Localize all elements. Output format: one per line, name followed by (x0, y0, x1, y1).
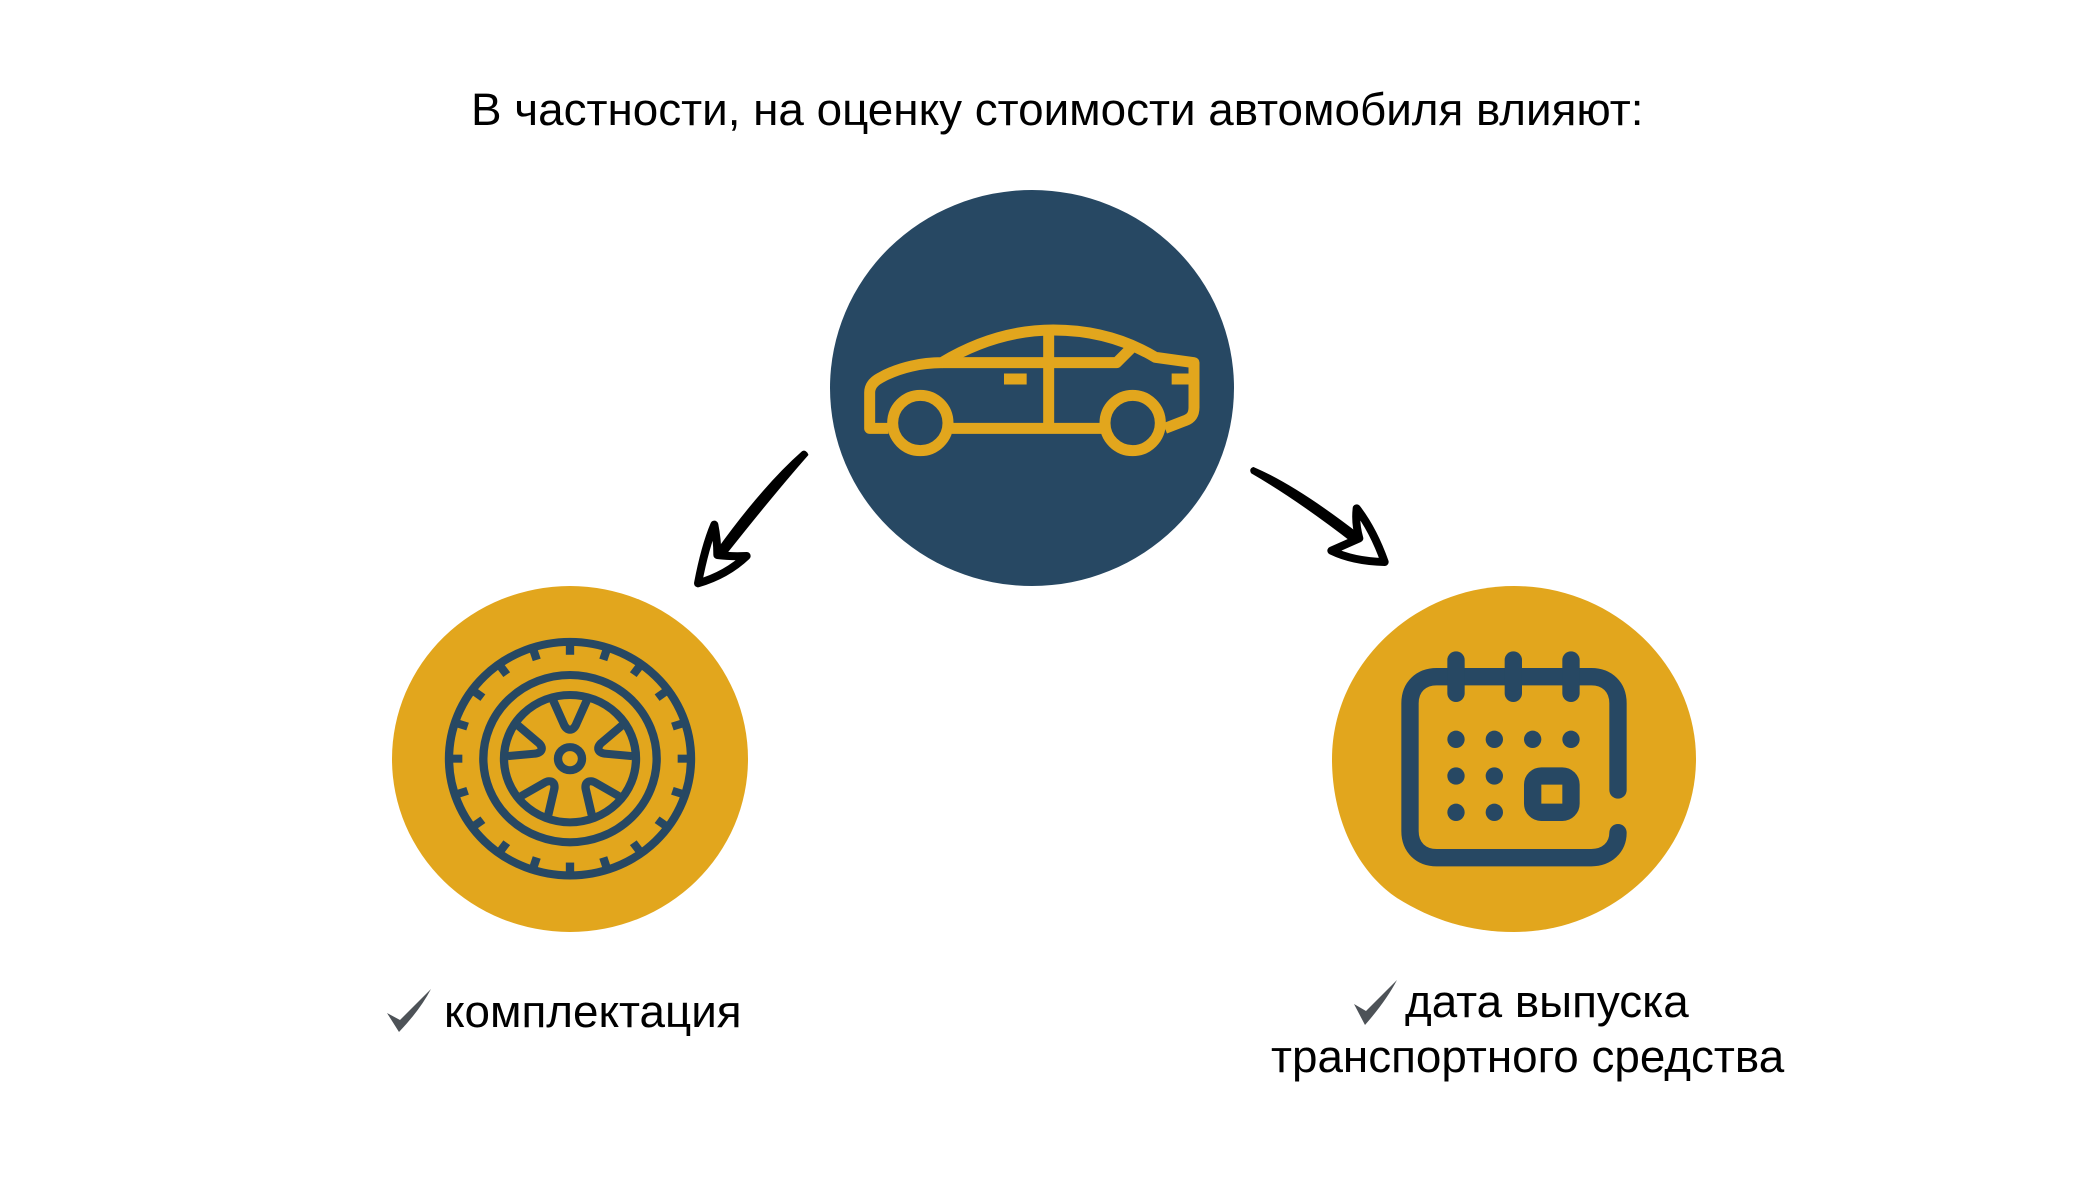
navy circle (830, 190, 1234, 586)
label: дата выпуска (1271, 976, 1785, 1082)
panel: calendar (1332, 586, 1696, 932)
icon: calendar (1410, 660, 1618, 858)
icon: car (870, 330, 1194, 451)
arrow: to wheel (698, 452, 807, 583)
panel: car (830, 190, 1234, 586)
label: комплектация (387, 986, 742, 1037)
label text: дата выпуска (1405, 976, 1689, 1027)
title: В частности, на оценку стоимости автомобиля влияют: (471, 84, 1643, 135)
icon: check mark (1354, 980, 1397, 1025)
gold circle (392, 586, 748, 932)
label text second line: транспортного средства (1271, 1031, 1785, 1082)
arrow: to calendar (1251, 468, 1385, 562)
icon: check mark (387, 989, 431, 1032)
gold circle (1332, 586, 1696, 932)
icon: wheel (449, 642, 691, 875)
panel: wheel (392, 586, 748, 932)
label text: комплектация (444, 986, 742, 1037)
